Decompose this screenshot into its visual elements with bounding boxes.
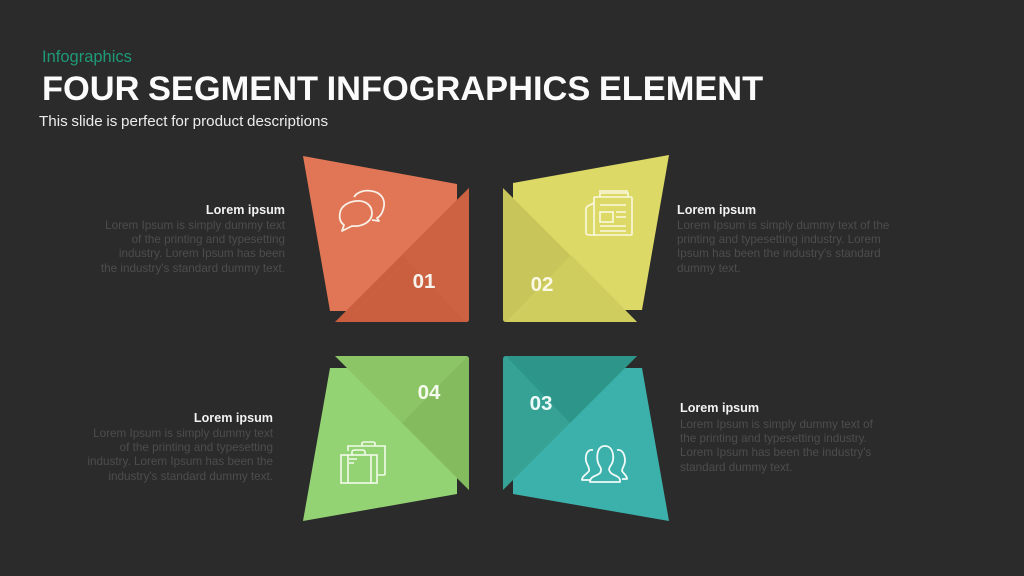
number 03: 03 <box>530 392 552 415</box>
body 01: industry. Lorem Ipsum has been <box>119 247 285 260</box>
heading 02: Lorem ipsum <box>677 203 756 217</box>
body 04: industry's standard dummy text. <box>108 470 273 483</box>
heading 03: Lorem ipsum <box>680 401 759 415</box>
number 01: 01 <box>413 270 435 293</box>
text block 01 <box>101 203 285 275</box>
body 04 <box>87 427 273 483</box>
body 03: standard dummy text. <box>680 461 792 474</box>
body 04: Lorem Ipsum is simply dummy text <box>93 427 273 440</box>
segment 01 <box>303 156 469 322</box>
body 01: of the printing and typesetting <box>132 233 285 246</box>
body 01 <box>101 219 285 275</box>
title: FOUR SEGMENT INFOGRAPHICS ELEMENT <box>42 70 763 108</box>
body 02: dummy text. <box>677 262 741 275</box>
body 03: Lorem Ipsum is simply dummy text of <box>680 418 873 431</box>
body 04: of the printing and typesetting <box>120 441 273 454</box>
text block 03 <box>680 401 873 474</box>
text block 02 <box>677 203 889 275</box>
subtitle: This slide is perfect for product descriptions <box>39 113 328 130</box>
body 01: the industry's standard dummy text. <box>101 262 285 275</box>
icon: suitcases <box>341 442 385 483</box>
body 02 <box>677 219 889 275</box>
body 02: Ipsum has been the industry's standard <box>677 247 881 260</box>
text block 04 <box>87 411 273 483</box>
eyebrow label: Infographics <box>42 48 132 66</box>
number 04: 04 <box>418 381 441 404</box>
heading 04: Lorem ipsum <box>194 411 273 425</box>
body 01: Lorem Ipsum is simply dummy text <box>105 219 285 232</box>
icon: people <box>582 446 627 482</box>
body 03 <box>680 418 873 474</box>
body 03: the printing and typesetting industry. <box>680 432 867 445</box>
body 04: industry. Lorem Ipsum has been the <box>87 455 273 468</box>
heading 01: Lorem ipsum <box>206 203 285 217</box>
segment 04 <box>303 356 469 521</box>
icon: newspaper <box>586 191 632 235</box>
body 03: Lorem Ipsum has been the industry's <box>680 446 871 459</box>
icon: speech bubbles <box>340 191 384 231</box>
segment 03 <box>503 356 669 521</box>
body 02: Lorem Ipsum is simply dummy text of the <box>677 219 889 232</box>
number 02: 02 <box>531 273 553 296</box>
segment 02 <box>503 155 669 322</box>
body 02: printing and typesetting industry. Lorem <box>677 233 881 246</box>
